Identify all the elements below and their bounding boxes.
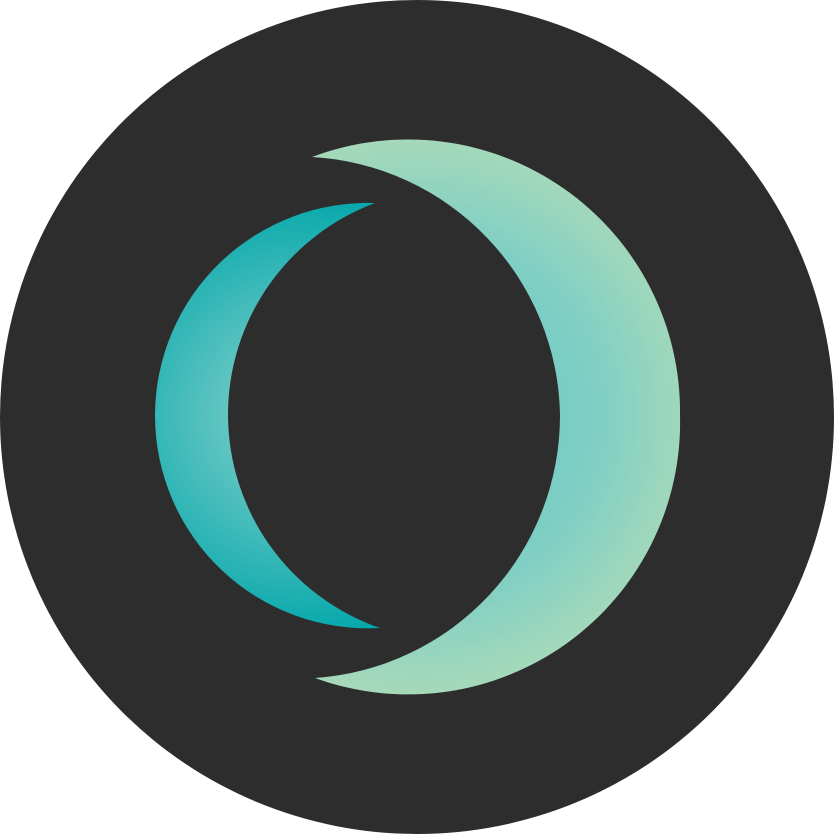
right crescent — [312, 139, 680, 694]
left crescent — [155, 203, 380, 628]
